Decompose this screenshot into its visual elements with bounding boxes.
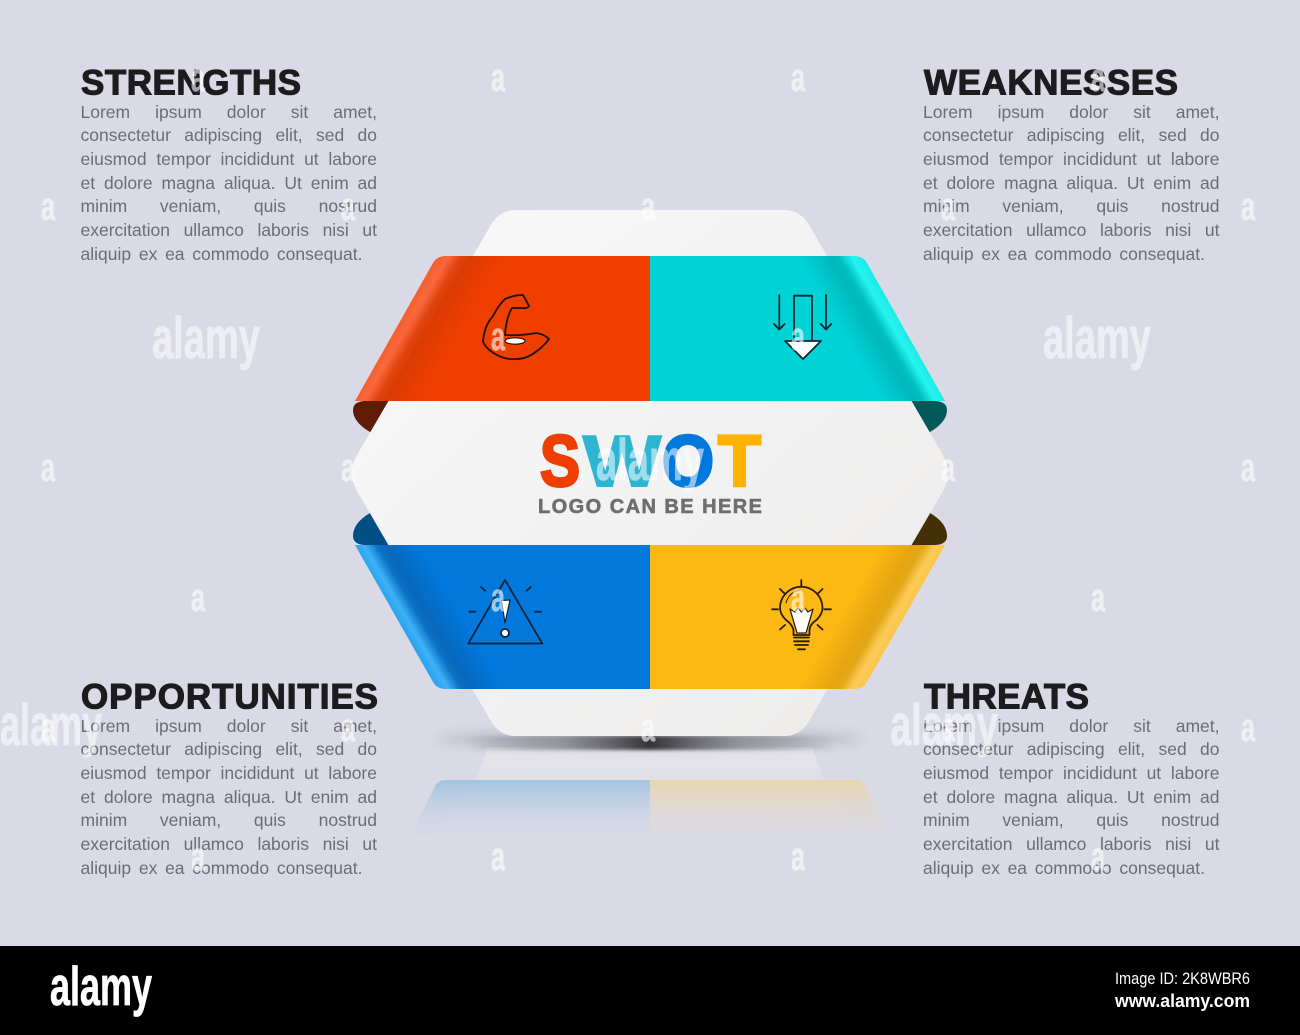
text block: threats: Lorem ipsum dolor sit amet, [923,716,1220,736]
watermark: small a marks: a [491,576,505,620]
footer logo: alamy [50,955,152,1017]
watermark: large alamy marks: alamy [0,693,102,758]
text block: opportunities: aliquip ex ea commodo consequat. [80,858,362,878]
text block: weaknesses [923,102,1220,264]
watermark: small a marks: a [791,835,805,879]
watermark: large alamy marks: alamy [152,306,260,371]
watermark: small a marks: a [491,56,505,100]
watermark: small a marks: a [941,185,955,229]
watermark: small a marks: a [191,576,205,620]
text block: strengths: consectetur adipiscing elit, sed do [80,125,377,145]
text block: weaknesses: Lorem ipsum dolor sit amet, [923,102,1220,122]
heading: strengths: STRENGTHS [81,64,301,102]
heading: threats: THREATS [924,678,1089,716]
text block: weaknesses: consectetur adipiscing elit, sed do [923,125,1220,145]
watermark: small a marks [41,56,1255,879]
SWOT logo: O [662,422,714,502]
text block: opportunities: eiusmod tempor incididunt ut labore [80,763,377,783]
watermark: small a marks: a [641,706,655,750]
folded ribbon ends [353,401,947,545]
text block: strengths: Lorem ipsum dolor sit amet, [80,102,377,122]
text block: opportunities: consectetur adipiscing elit, sed do [80,739,377,759]
icon: flexed arm [483,295,549,359]
watermark: small a marks: a [791,56,805,100]
watermark: small a marks: a [491,315,505,359]
text block: threats: consectetur adipiscing elit, sed do [923,739,1220,759]
text block: opportunities: minim veniam, quis nostrud [80,810,377,830]
white hexagon card [352,210,948,736]
text block: weaknesses: eiusmod tempor incididunt ut labore [923,149,1220,169]
watermark: small a marks: a [1091,56,1105,100]
watermark: small a marks: a [641,185,655,229]
text block: strengths: aliquip ex ea commodo consequat. [80,244,362,264]
text block: threats: et dolore magna aliqua. Ut enim ad [923,787,1220,807]
watermark: small a marks: a [491,835,505,879]
watermark: small a marks: a [791,315,805,359]
watermark: small a marks: a [941,446,955,490]
SWOT logo: W [583,422,661,502]
text block: strengths: et dolore magna aliqua. Ut enim ad [80,173,377,193]
panel: weaknesses band [650,256,945,401]
heading: opportunities: OPPORTUNITIES [81,678,378,716]
text block: opportunities: exercitation ullamco laboris nisi ut [80,834,377,854]
watermark: small a marks: a [341,446,355,490]
watermark: small a marks: a [1241,446,1255,490]
watermark: small a marks: a [41,446,55,490]
panel: strengths band [355,256,650,401]
text block: strengths: minim veniam, quis nostrud [80,196,377,216]
watermark: small a marks: a [341,185,355,229]
panel: threats band [650,545,945,689]
heading: weaknesses: WEAKNESSES [924,64,1178,102]
SWOT logo: S [540,422,580,502]
watermark: large alamy marks: alamy [596,428,704,493]
text block: strengths: eiusmod tempor incididunt ut labore [80,149,377,169]
text block: threats: minim veniam, quis nostrud [923,810,1220,830]
icon: down arrows [774,295,831,359]
reflection below hexagon [405,747,895,860]
text block: weaknesses: minim veniam, quis nostrud [923,196,1220,216]
watermark: small a marks: a [1091,835,1105,879]
text block: weaknesses: et dolore magna aliqua. Ut enim ad [923,173,1220,193]
text block: opportunities: Lorem ipsum dolor sit amet, [80,716,377,736]
watermark: small a marks: a [1241,185,1255,229]
text block: strengths [80,102,377,264]
watermark: large alamy marks [0,306,1151,758]
watermark: small a marks: a [191,835,205,879]
SWOT logo: T [718,422,761,502]
footer image id: Image ID: 2K8WBR6 [1115,969,1250,988]
watermark: small a marks: a [191,56,205,100]
text block: opportunities [80,716,377,878]
watermark: small a marks: a [41,706,55,750]
text block: threats: eiusmod tempor incididunt ut labore [923,763,1220,783]
watermark: small a marks: a [1091,576,1105,620]
watermark: small a marks: a [41,185,55,229]
icon: light bulb [772,580,831,649]
text block: threats [923,716,1220,878]
text block: opportunities: et dolore magna aliqua. Ut enim ad [80,787,377,807]
icon: warning triangle [468,580,542,644]
SWOT logo [538,422,762,518]
SWOT logo: LOGO CAN BE HERE [538,496,762,518]
hexagon ground shadow [435,731,865,750]
watermark: small a marks: a [1241,706,1255,750]
footer bar [0,946,1300,1035]
text block: threats: exercitation ullamco laboris nisi ut [923,834,1220,854]
text block: weaknesses: exercitation ullamco laboris nisi ut [923,220,1220,240]
watermark: small a marks: a [941,706,955,750]
watermark: small a marks: a [341,706,355,750]
text block: strengths: exercitation ullamco laboris nisi ut [80,220,377,240]
footer url: www.alamy.com [1114,991,1250,1011]
watermark: large alamy marks: alamy [890,693,998,758]
text block: weaknesses: aliquip ex ea commodo consequat. [923,244,1205,264]
watermark: small a marks: a [791,576,805,620]
text block: threats: aliquip ex ea commodo consequat. [923,858,1205,878]
panel: opportunities band [355,545,650,689]
watermark: large alamy marks: alamy [1043,306,1151,371]
